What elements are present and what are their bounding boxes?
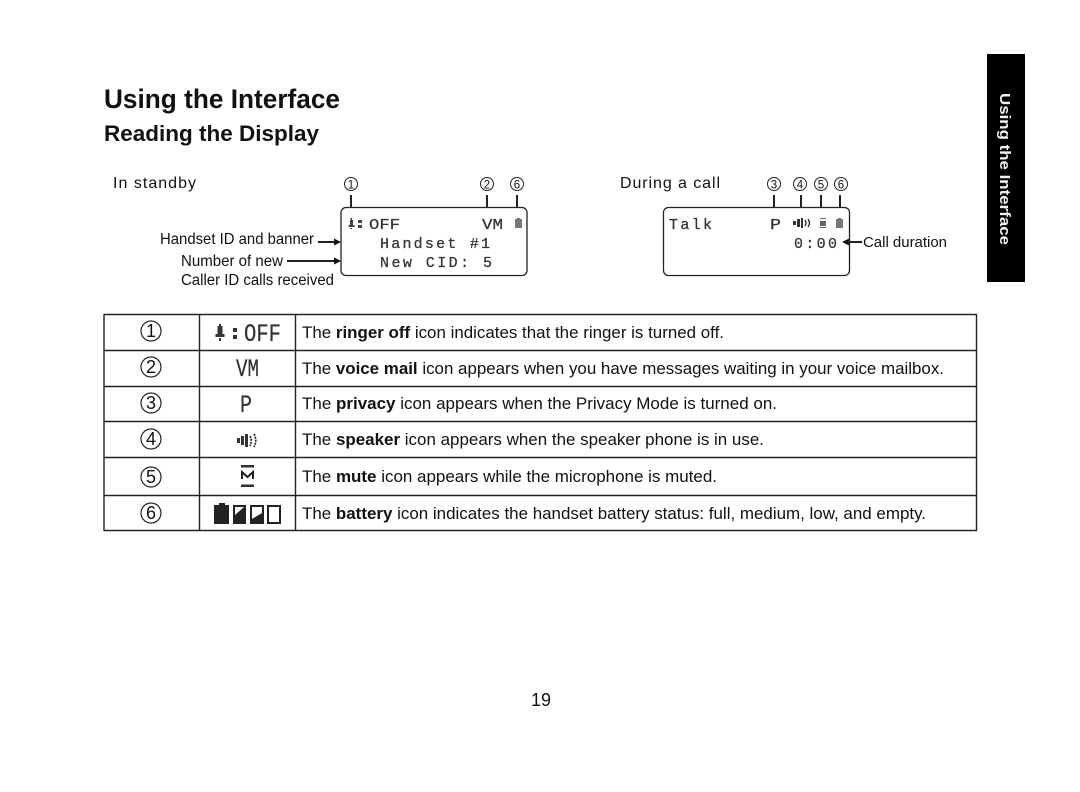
callout numbers: 3 <box>771 180 777 192</box>
callout numbers <box>344 178 524 208</box>
annotation: new caller ID: Caller ID calls received <box>181 272 334 289</box>
section heading: Reading the Display <box>104 121 320 146</box>
page number: 19 <box>531 690 551 710</box>
LCD screen <box>341 208 527 276</box>
callout numbers: 2 <box>484 180 490 192</box>
row 6: battery: The battery icon indicates the handset battery status: full, medium, low, and empty. <box>302 504 926 523</box>
LCD screen <box>664 208 850 276</box>
callout numbers: 1 <box>348 180 354 192</box>
callout numbers: 5 <box>818 180 824 192</box>
row 2: voice mail: The voice mail icon appears when you have messages waiting in your voice mailbox. <box>302 359 944 378</box>
row 1: ringer off: 1 <box>146 321 156 341</box>
row 2: voice mail: 2 <box>146 357 156 377</box>
LCD screen: Handset #1 <box>380 236 490 253</box>
table grid <box>104 314 977 531</box>
table: icon legend <box>104 314 977 531</box>
row 2: voice mail: VM <box>236 355 259 384</box>
row 3: privacy: 3 <box>146 393 156 413</box>
row 6: battery: 6 <box>146 503 156 523</box>
side tab: Using the Interface <box>996 93 1013 245</box>
call label: During a call <box>620 175 720 192</box>
row 1: ringer off: OFF <box>244 320 281 349</box>
panel: during a call display <box>620 175 947 276</box>
annotation: handset ID: Handset ID and banner <box>160 231 314 248</box>
row 1: ringer off <box>141 320 724 349</box>
row 5: mute: 5 <box>146 467 156 487</box>
title: Using the Interface <box>104 84 340 114</box>
row 1: ringer off: The ringer off icon indicates that the ringer is turned off. <box>302 323 724 342</box>
side tab <box>987 54 1025 282</box>
row 3: privacy: The privacy icon appears when the Privacy Mode is turned on. <box>302 394 777 413</box>
annotation: new caller ID <box>181 253 341 289</box>
standby label: In standby <box>113 175 196 192</box>
panel: standby display <box>113 175 527 289</box>
LCD screen: 0:00 <box>794 236 837 253</box>
LCD screen: P <box>770 217 781 234</box>
LCD screen: OFF <box>369 217 400 234</box>
row 2: voice mail <box>141 355 944 384</box>
LCD screen: VM <box>482 217 503 234</box>
callout numbers <box>768 178 848 208</box>
row 4: speaker: The speaker icon appears when the speaker phone is in use. <box>302 430 764 449</box>
LCD screen: Talk <box>669 217 712 234</box>
row 3: privacy <box>141 391 777 420</box>
annotation: new caller ID: Number of new <box>181 253 284 270</box>
callout numbers: 6 <box>514 180 520 192</box>
callout numbers: 4 <box>797 180 804 192</box>
row 4: speaker: 4 <box>146 429 156 449</box>
annotation: call duration: Call duration <box>863 234 947 251</box>
LCD screen: New CID: 5 <box>380 255 492 272</box>
row 5: mute: The mute icon appears while the microphone is muted. <box>302 467 717 486</box>
callout numbers: 6 <box>838 180 844 192</box>
row 5: mute <box>141 465 717 487</box>
row 3: privacy: P <box>240 391 252 420</box>
